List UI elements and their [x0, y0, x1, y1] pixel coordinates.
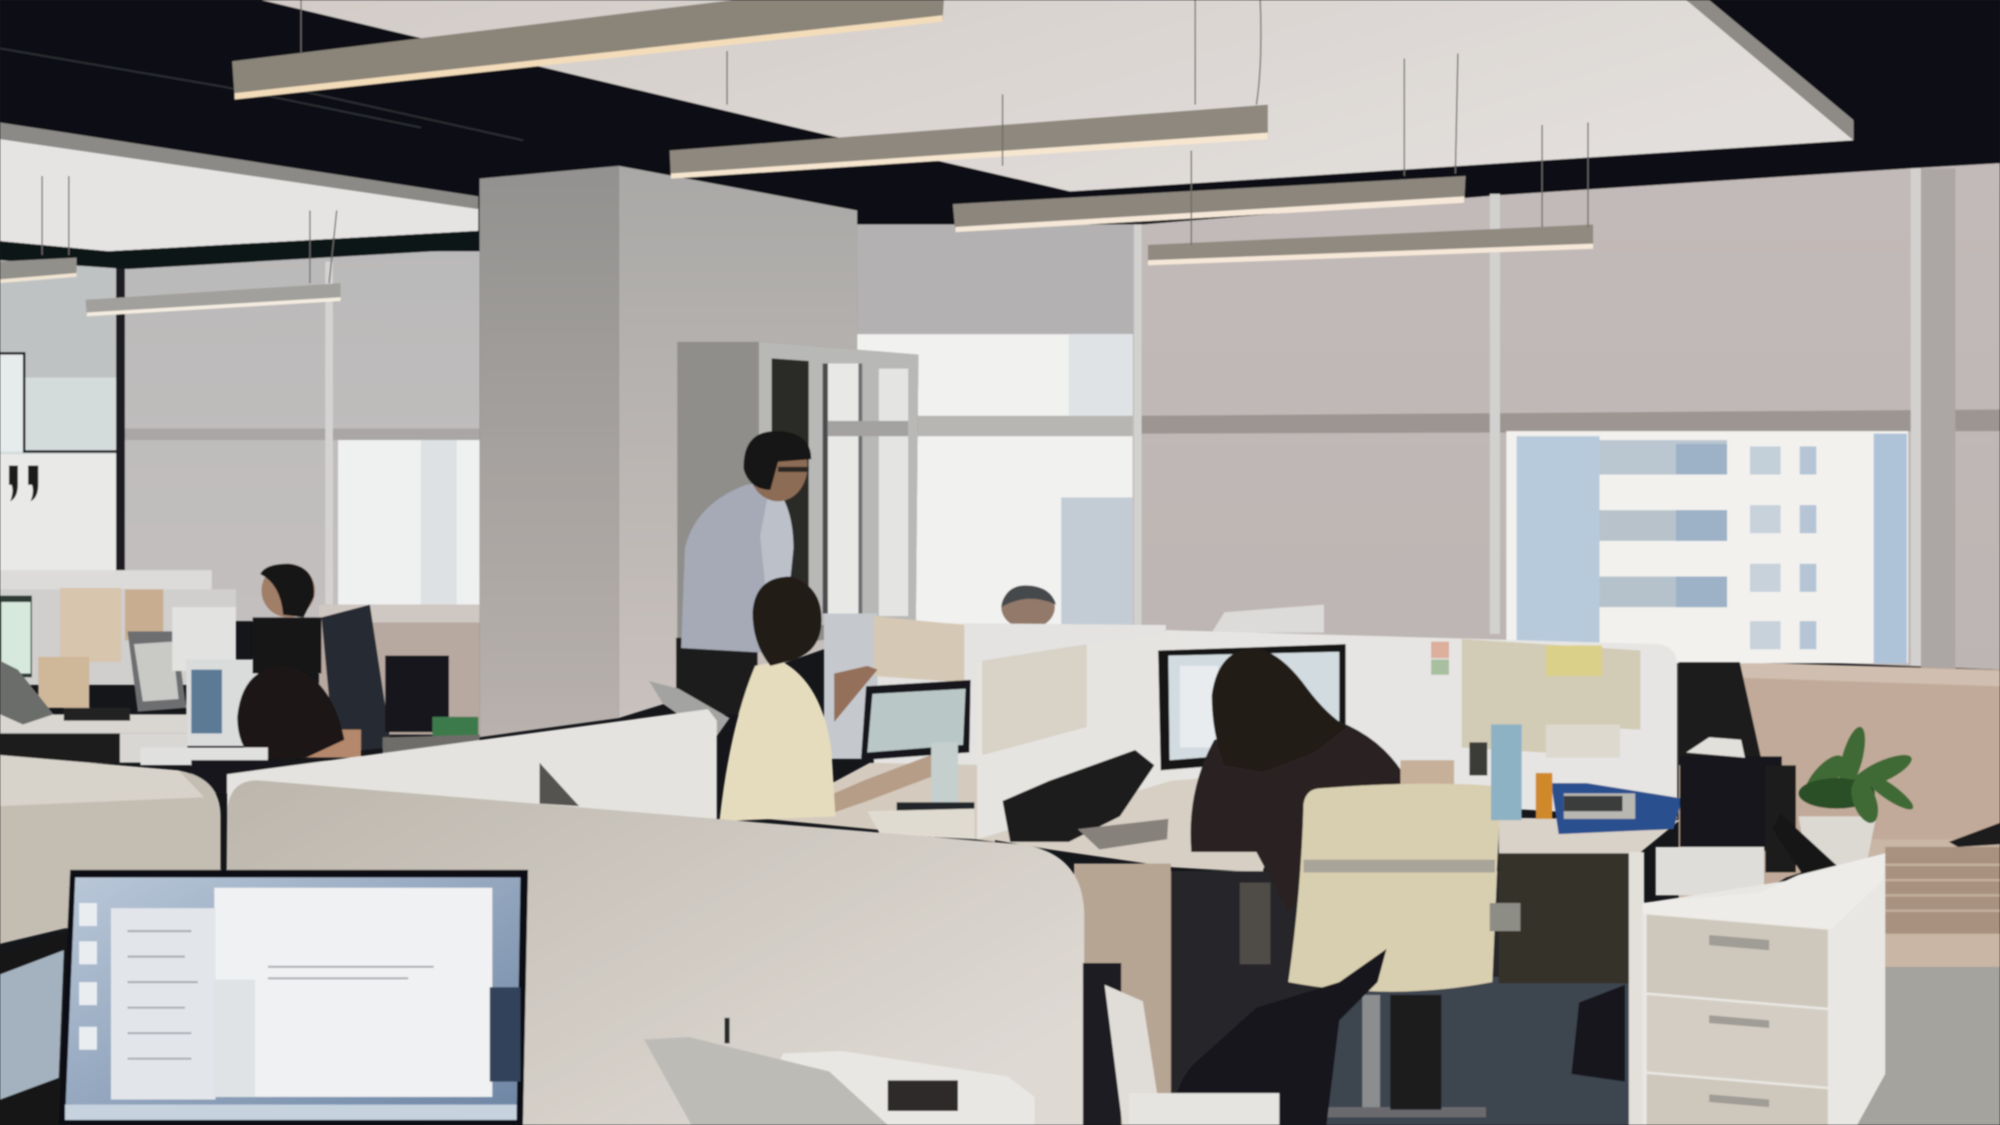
printer	[644, 1018, 1034, 1125]
column right face	[619, 166, 857, 718]
light suspension wires	[42, 0, 1588, 283]
near left partition	[0, 755, 221, 944]
right window with building	[1506, 431, 1908, 663]
papers on partition	[874, 616, 964, 682]
desk phone	[1758, 814, 1844, 903]
radiator	[1867, 823, 2000, 967]
woman with long hair	[1191, 648, 1454, 912]
cabinet	[677, 342, 918, 663]
left room dark strip	[0, 231, 478, 269]
pinned papers right	[1431, 639, 1640, 758]
wall pillar line	[116, 268, 125, 574]
woman left, hair	[140, 666, 383, 793]
black mesh chair	[1173, 949, 1386, 1125]
left room back wall	[125, 251, 480, 621]
back wall roller blinds	[857, 163, 2000, 670]
blind shade band	[1139, 409, 2000, 434]
right floor	[1849, 959, 2000, 1125]
window mullions	[1134, 168, 1921, 666]
dark triangle on partition	[540, 763, 579, 806]
bag on floor	[1571, 985, 1625, 1082]
laptop and woman in cream	[719, 577, 974, 821]
ceiling pipe lines	[0, 48, 523, 140]
center partition	[977, 631, 1180, 839]
desks	[765, 763, 1680, 1125]
paper tray stack	[1083, 963, 1279, 1125]
column front face	[480, 166, 619, 737]
left room partition and clutter	[0, 570, 268, 763]
front partition	[224, 780, 1084, 1125]
center blind top	[857, 224, 1134, 334]
desk papers and folders	[867, 750, 1168, 849]
ceiling panel right edge band	[1686, 0, 1853, 140]
mid glass partition	[227, 709, 717, 819]
dark ceiling	[0, 0, 2000, 255]
man standing	[676, 431, 811, 714]
back partition row	[824, 605, 1677, 819]
green box	[432, 717, 478, 736]
left room lower wall	[319, 605, 480, 735]
jacket on chair	[321, 605, 392, 753]
far right blind edge	[1921, 168, 1955, 670]
left blind shade band	[125, 429, 480, 440]
left window	[338, 440, 480, 607]
back monitor	[1158, 644, 1346, 770]
window sill	[1728, 662, 2000, 686]
chair behind woman in cream	[649, 681, 730, 740]
left ceiling beam	[0, 122, 478, 209]
floor behind partition	[383, 735, 480, 760]
left room graphic wall	[0, 251, 117, 583]
front monitor	[59, 870, 528, 1125]
center window	[857, 334, 1133, 625]
under desk floor	[1171, 871, 1633, 1125]
filing cabinet	[1643, 853, 1885, 1125]
back wall lower beige	[1679, 661, 2000, 969]
ceiling lights	[0, 0, 1593, 316]
left ceiling panel	[0, 139, 478, 251]
wall graphic quote	[0, 352, 117, 501]
second monitor far left	[0, 930, 66, 1125]
plant	[1797, 724, 1917, 872]
seated man left	[253, 564, 321, 673]
center partition papers	[982, 644, 1087, 755]
black printer back	[385, 656, 449, 732]
back right monitor	[1679, 662, 1763, 765]
main ceiling panel	[261, 0, 1853, 191]
right side tray, bottle, basket	[1469, 724, 1796, 895]
back man head	[1001, 585, 1056, 629]
beige office chair	[1240, 784, 1520, 1117]
